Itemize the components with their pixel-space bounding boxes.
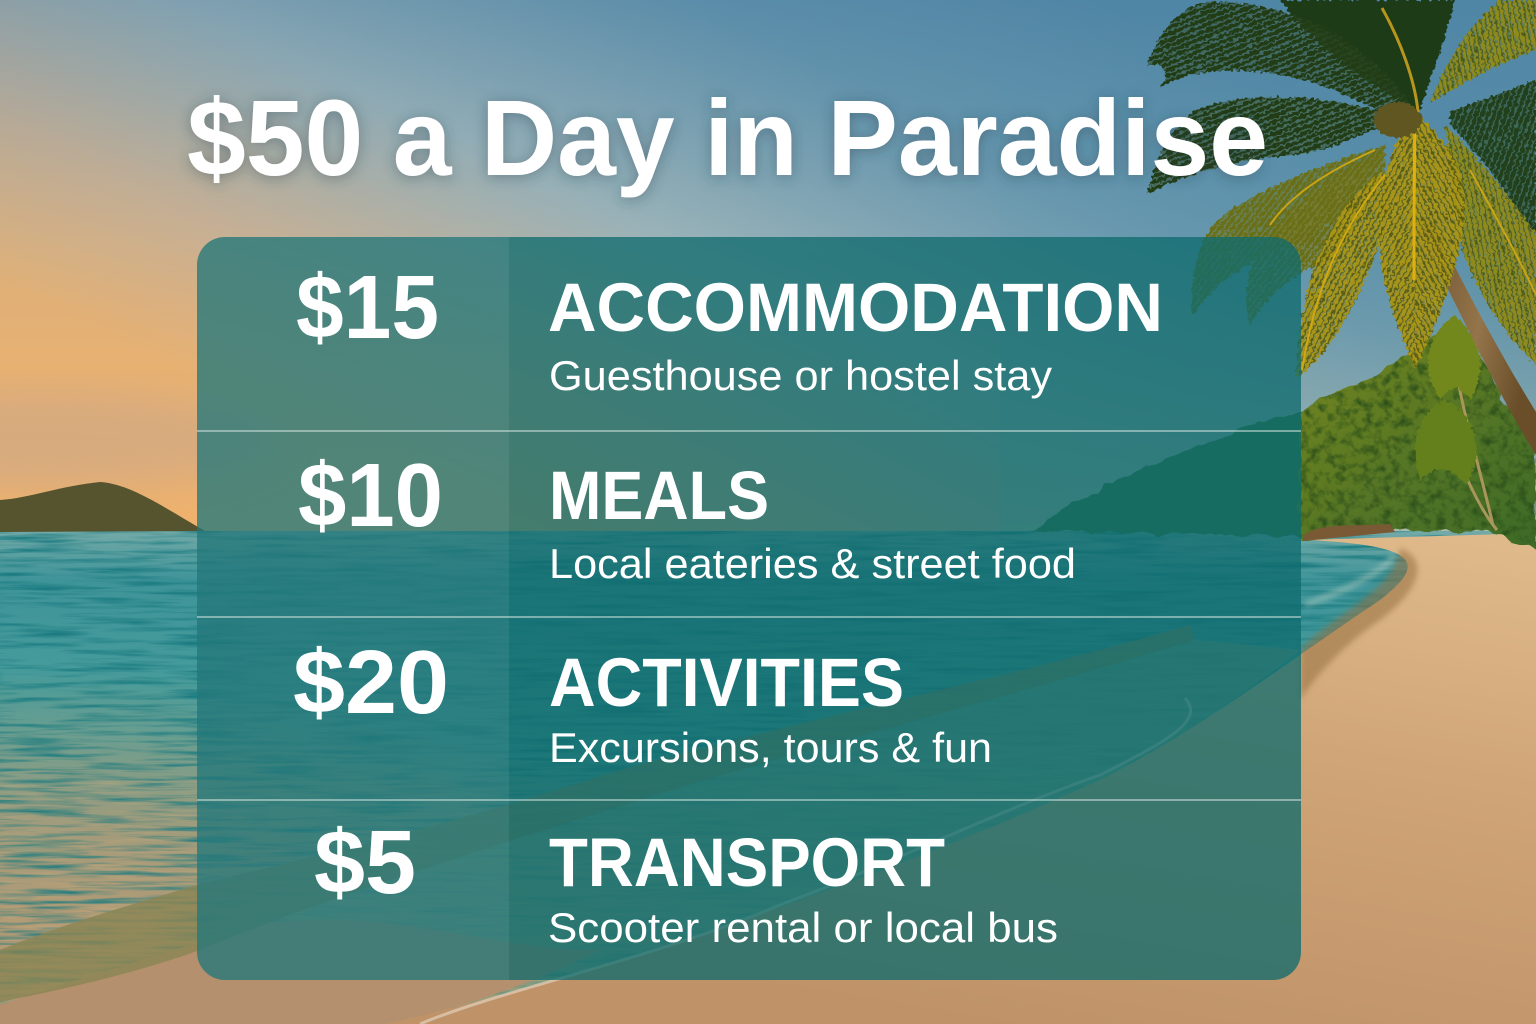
budget panel — [197, 237, 1301, 980]
jungle texture — [1300, 335, 1536, 545]
frond midribs — [1270, 8, 1536, 370]
rocks on shore — [1303, 524, 1395, 541]
price: $20 — [293, 633, 449, 733]
sky — [0, 0, 1536, 540]
description: Excursions, tours & fun — [549, 724, 992, 771]
row: transport — [314, 813, 1058, 951]
shore foam — [1305, 555, 1395, 605]
frond centre golden — [1380, 113, 1465, 368]
description: Guesthouse or hostel stay — [549, 352, 1052, 399]
wave band — [0, 625, 1195, 1002]
row: activities — [293, 633, 992, 771]
frond upper left — [1147, 2, 1417, 118]
description: Scooter rental or local bus — [548, 904, 1058, 951]
frond upper right — [1430, 0, 1536, 103]
frond left — [1147, 97, 1385, 195]
far headland — [1030, 410, 1305, 536]
small palm left — [1428, 315, 1493, 525]
price column tint — [197, 237, 509, 980]
category: TRANSPORT — [549, 824, 945, 901]
frond lower left two — [1246, 150, 1385, 325]
small palm right — [1415, 400, 1497, 530]
shallow water — [200, 640, 1300, 1024]
price: $15 — [296, 258, 439, 358]
description: Local eateries & street food — [549, 540, 1076, 587]
price: $10 — [298, 446, 443, 546]
row: accommodation — [296, 258, 1163, 399]
jungle — [1300, 335, 1536, 548]
wet sand — [0, 920, 600, 1024]
palm tree — [1147, 0, 1536, 455]
panel background — [197, 237, 1301, 980]
category: ACTIVITIES — [549, 644, 904, 721]
sea — [0, 531, 1536, 1024]
frond right golden — [1445, 125, 1536, 365]
palm trunk — [1418, 220, 1536, 455]
palm crown — [1374, 102, 1422, 138]
frond right dark — [1450, 80, 1536, 238]
frond down left — [1296, 170, 1392, 378]
price: $5 — [314, 813, 416, 913]
wet shoreline shadow — [1300, 548, 1417, 700]
category: ACCOMMODATION — [548, 269, 1163, 346]
fronds — [1147, 0, 1536, 378]
foam line — [420, 698, 1191, 1024]
frond lower left — [1192, 145, 1385, 315]
title: $50 a Day in Paradise — [187, 77, 1268, 198]
frond top — [1280, 0, 1455, 110]
left hill — [0, 482, 205, 532]
beach sand — [385, 533, 1536, 1024]
category: MEALS — [549, 457, 769, 534]
row: meals — [298, 446, 1076, 587]
